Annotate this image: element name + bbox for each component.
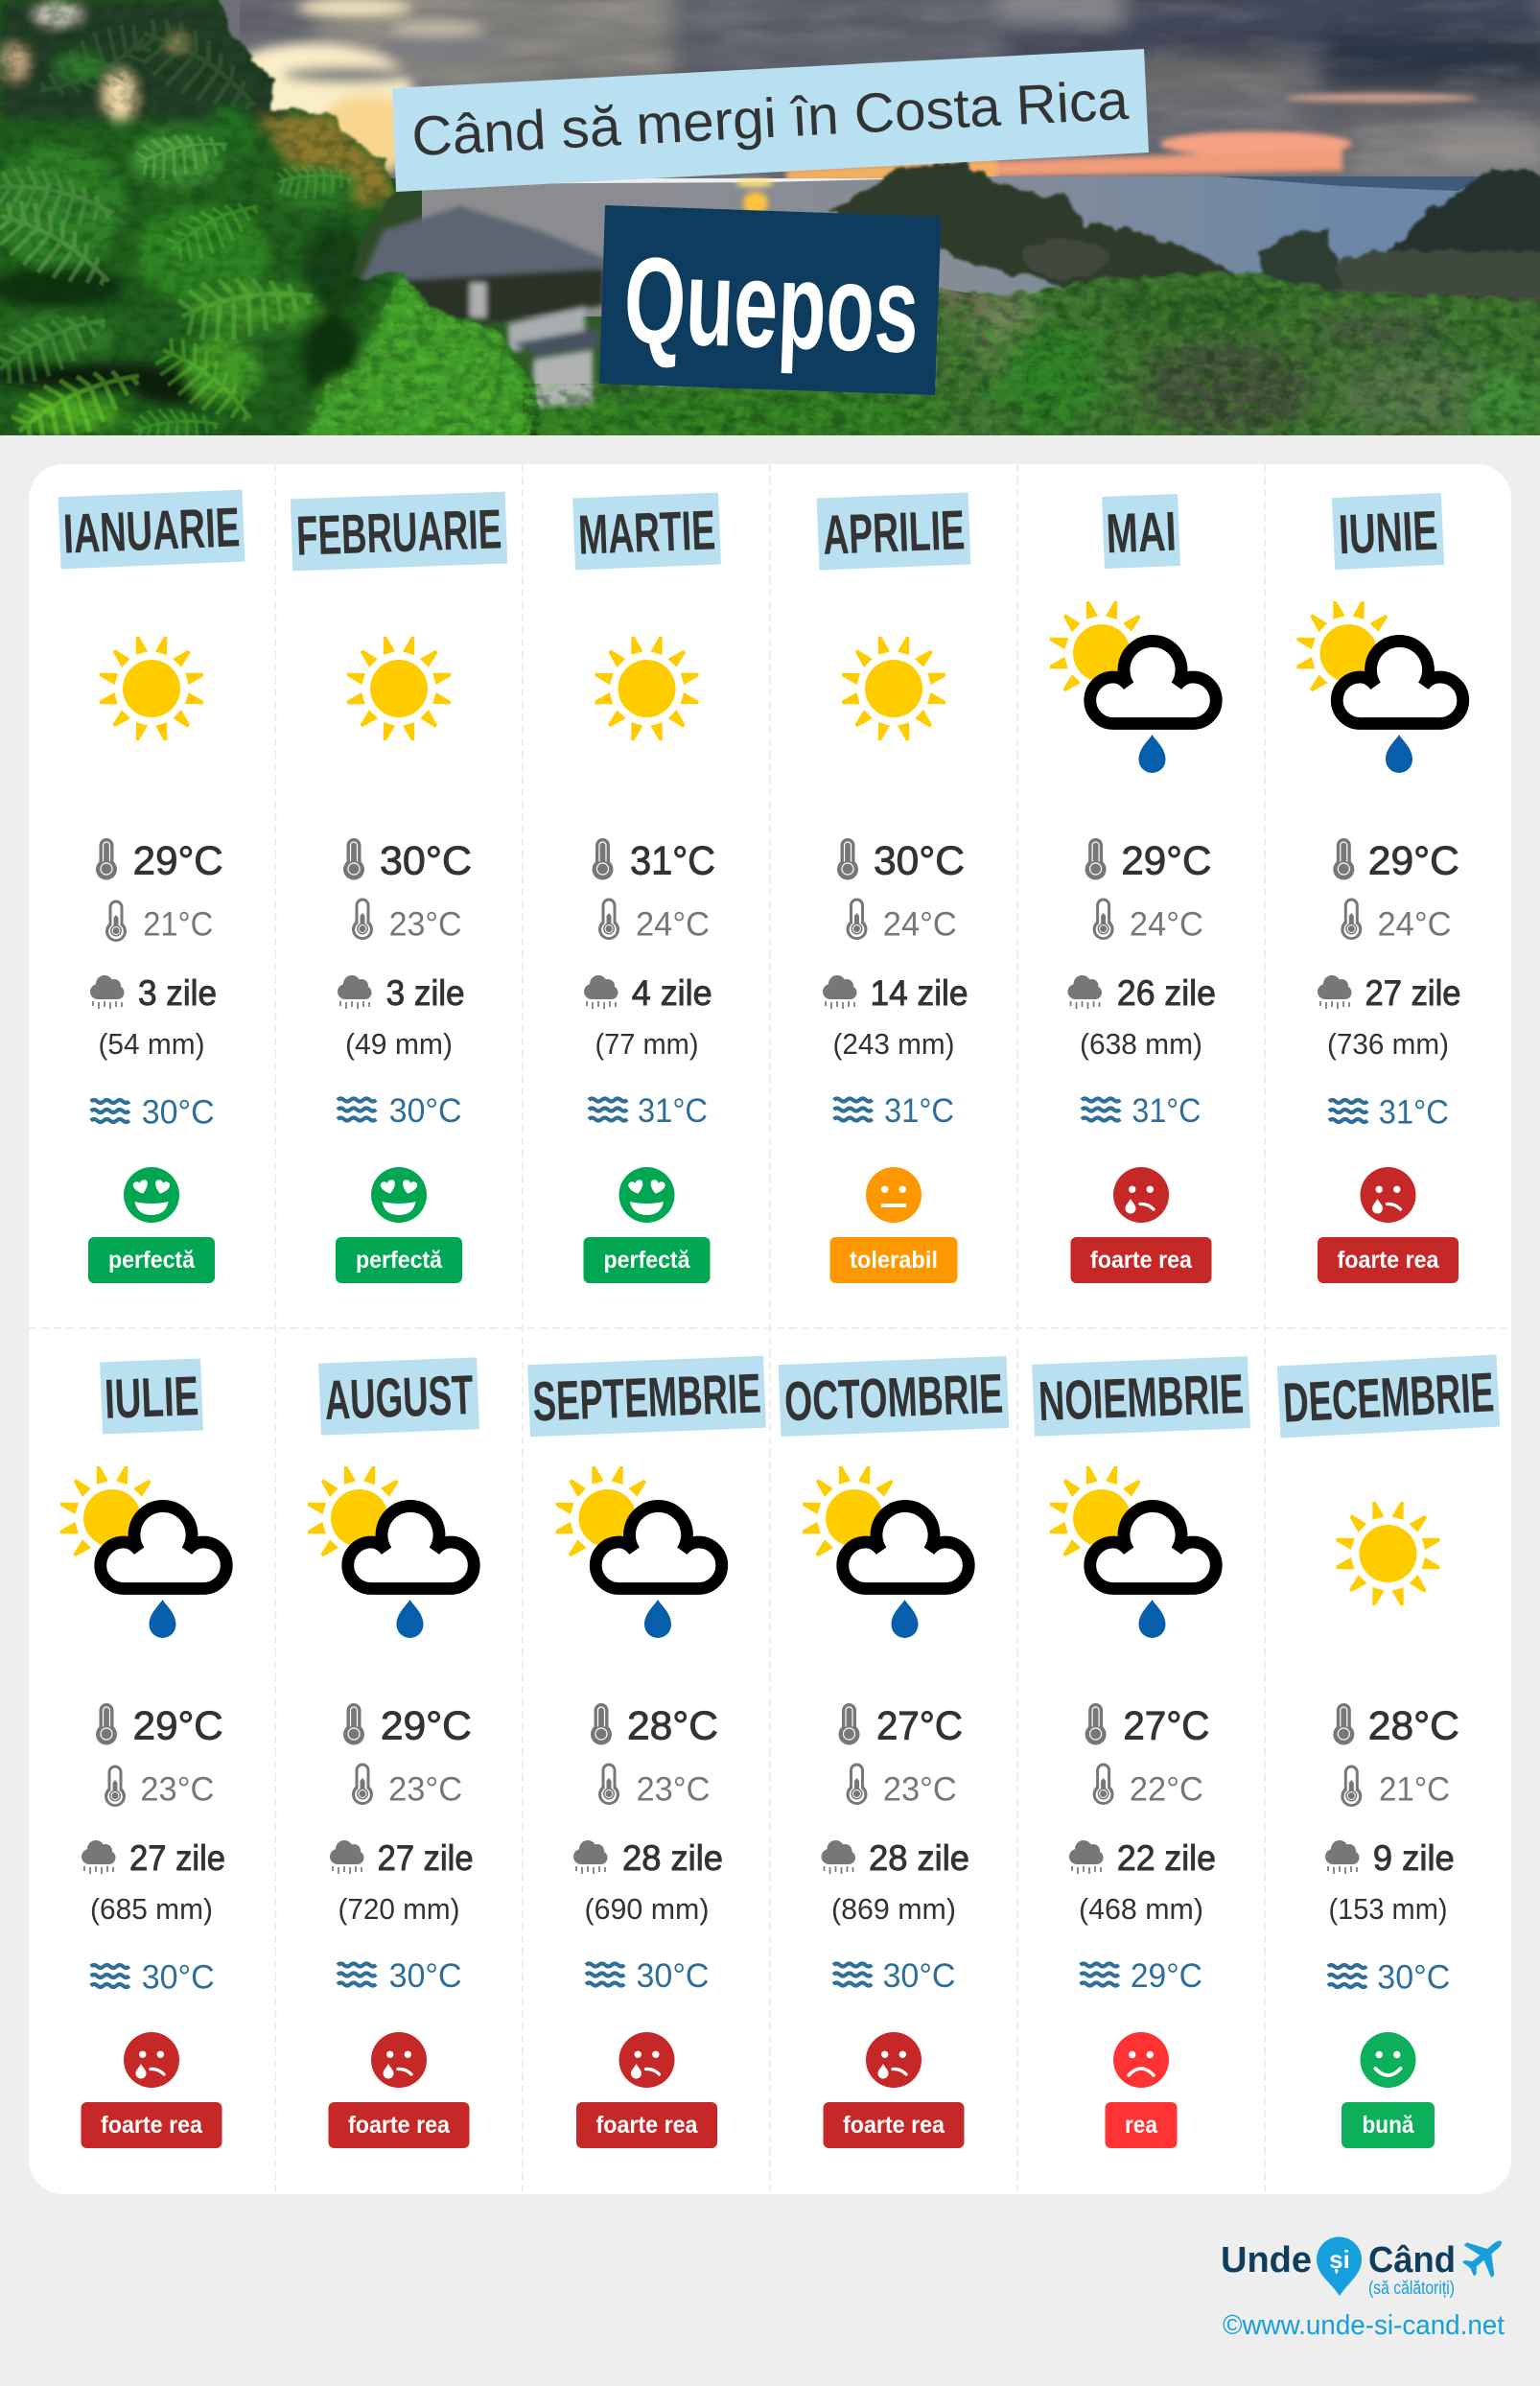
hillside and forest <box>593 269 1540 435</box>
low temperature: 24°C <box>1130 906 1203 944</box>
rainy days <box>823 973 968 1013</box>
rainy days: 22 zile <box>1117 1838 1216 1878</box>
high temperature: 29°C <box>1121 838 1211 883</box>
low temperature: 22°C <box>1130 1771 1203 1809</box>
low temperature <box>846 1763 957 1809</box>
rainy days: 9 zile <box>1373 1838 1455 1878</box>
sea temperature <box>834 1092 954 1130</box>
logo: Unde și Când <box>1221 2225 1515 2299</box>
month label: SEPTEMBRIE <box>527 1356 766 1437</box>
month label: APRILIE: APRILIE <box>822 499 966 567</box>
low temperature <box>598 898 710 944</box>
month label: IULIE <box>100 1359 203 1434</box>
high temperature: 31°C <box>630 838 715 883</box>
high temperature: 29°C <box>381 1703 472 1748</box>
low temperature: 24°C <box>636 906 710 944</box>
rainy days <box>1069 1838 1216 1878</box>
low temperature: 21°C <box>143 906 213 944</box>
icon: rating face <box>124 1167 179 1223</box>
rainy days: 27 zile <box>129 1838 225 1878</box>
high temperature: 28°C <box>1368 1703 1459 1748</box>
city name box <box>599 205 942 395</box>
low temperature <box>598 1763 710 1809</box>
month label: AUGUST <box>318 1357 479 1436</box>
high temperature: 27°C <box>876 1703 963 1748</box>
low temperature <box>105 900 213 944</box>
month label: MARTIE: MARTIE <box>577 499 716 567</box>
sea temperature <box>91 1959 215 1997</box>
sea temperature <box>586 1957 710 1995</box>
icon: rating face <box>1360 2032 1415 2088</box>
rating badge <box>823 2102 965 2148</box>
column: mai <box>1050 494 1216 1283</box>
sea temperature <box>589 1092 708 1130</box>
rainy days <box>821 1838 969 1878</box>
icon: sun <box>347 637 451 740</box>
month label: MAI <box>1102 494 1180 569</box>
high temperature <box>1085 1703 1209 1748</box>
icon: map pin <box>1317 2236 1362 2296</box>
rating badge <box>583 1237 710 1283</box>
high temperature: 29°C <box>133 1703 223 1748</box>
rating badge <box>328 2102 470 2148</box>
month label: MAI: MAI <box>1105 501 1178 565</box>
rainy days <box>338 973 465 1013</box>
sea temperature: 31°C <box>1379 1094 1449 1132</box>
icon: sun, cloud and rain drop <box>803 1466 968 1638</box>
rating badge: foarte rea <box>348 2112 451 2139</box>
high temperature: 30°C <box>380 838 472 883</box>
sea temperature: 31°C <box>1132 1092 1201 1130</box>
sea temperature: 30°C <box>1377 1959 1450 1997</box>
icon: sun, cloud and rain drop <box>1296 601 1463 773</box>
rainfall: (243 mm) <box>832 1027 955 1061</box>
low temperature <box>1093 898 1203 944</box>
month label: APRILIE <box>817 492 970 571</box>
low temperature: 24°C <box>883 906 957 944</box>
month label: SEPTEMBRIE: SEPTEMBRIE <box>531 1362 762 1434</box>
villa <box>359 204 612 435</box>
rainy days: 3 zile <box>138 973 217 1013</box>
sea temperature <box>1081 1957 1202 1995</box>
icon: rating face <box>866 2032 922 2088</box>
month label: IANUARIE: IANUARIE <box>62 496 241 566</box>
low temperature <box>352 1763 462 1809</box>
website link: ©www.unde-si-cand.net <box>1223 2310 1505 2341</box>
icon: sun <box>842 637 945 740</box>
column: decembrie <box>1277 1355 1500 2148</box>
logo: Unde și Când: (să călătoriți) <box>1368 2279 1455 2299</box>
sea temperature: 31°C <box>884 1092 954 1130</box>
rating badge <box>576 2102 717 2148</box>
rainy days: 3 zile <box>386 973 465 1013</box>
rainy days <box>90 973 217 1013</box>
low temperature <box>1093 1763 1203 1809</box>
column: noiembrie <box>1032 1356 1250 2148</box>
rainy days: 28 zile <box>622 1838 723 1878</box>
month label: FEBRUARIE <box>291 492 507 571</box>
rainfall: (468 mm) <box>1079 1892 1203 1926</box>
rainfall: (638 mm) <box>1080 1027 1202 1061</box>
rating badge <box>1342 2102 1435 2148</box>
left jungle <box>0 0 547 461</box>
column: aprilie <box>817 492 970 1283</box>
low temperature <box>846 898 957 944</box>
column: iulie <box>60 1359 226 2148</box>
rating badge: foarte rea <box>843 2112 945 2139</box>
sea temperature <box>91 1094 215 1132</box>
icon: sun <box>595 637 698 740</box>
icon: airplane <box>1455 2225 1515 2285</box>
high temperature: 30°C <box>874 838 965 883</box>
rainfall: (720 mm) <box>338 1892 460 1926</box>
column: octombrie <box>779 1356 1009 2148</box>
hills <box>829 163 1540 316</box>
icon: sun <box>1337 1502 1440 1605</box>
icon: sun, cloud and rain drop <box>556 1466 722 1638</box>
rainfall: (153 mm) <box>1329 1892 1448 1926</box>
low temperature: 23°C <box>388 1771 462 1809</box>
sea temperature: 30°C <box>142 1959 215 1997</box>
rating badge: foarte rea <box>596 2112 699 2139</box>
rating badge <box>1318 1237 1458 1283</box>
city name box: Quepos <box>622 232 921 379</box>
sea temperature: 29°C <box>1131 1957 1202 1995</box>
rainy days <box>82 1838 225 1878</box>
hero photo: sunset over jungle and sea <box>0 0 1540 461</box>
icon: rating face <box>1113 2032 1169 2088</box>
sea temperature <box>833 1957 955 1995</box>
month label: OCTOMBRIE <box>779 1356 1009 1437</box>
sea temperature: 30°C <box>389 1957 462 1995</box>
rating badge: perfectă <box>356 1247 443 1274</box>
low temperature: 23°C <box>389 906 462 944</box>
icon: rating face <box>371 1167 427 1223</box>
month label: FEBRUARIE: FEBRUARIE <box>295 498 502 568</box>
rainfall: (690 mm) <box>585 1892 710 1926</box>
sea temperature: 31°C <box>638 1092 708 1130</box>
month label: IANUARIE <box>58 490 245 569</box>
rating badge: foarte rea <box>101 2112 203 2139</box>
month label: NOIEMBRIE: NOIEMBRIE <box>1038 1363 1245 1433</box>
icon: rating face <box>1360 1167 1415 1223</box>
rainy days <box>584 973 712 1013</box>
high temperature: 29°C <box>1368 838 1459 883</box>
rating badge <box>81 2102 222 2148</box>
title banner: Când să mergi în Costa Rica <box>410 69 1131 168</box>
sea temperature: 30°C <box>637 1957 710 1995</box>
rating badge <box>1105 2102 1178 2148</box>
low temperature <box>105 1765 214 1809</box>
low temperature <box>1341 898 1452 944</box>
low temperature: 23°C <box>883 1771 957 1809</box>
rating badge: perfectă <box>604 1247 691 1274</box>
low temperature: 23°C <box>140 1771 214 1809</box>
rating badge: perfectă <box>108 1247 196 1274</box>
rating badge: rea <box>1125 2112 1158 2139</box>
sea temperature <box>1328 1959 1450 1997</box>
rainy days: 4 zile <box>632 973 712 1013</box>
rainy days: 26 zile <box>1117 973 1216 1013</box>
high temperature: 29°C <box>133 838 223 883</box>
logo: Unde și Când: Unde <box>1221 2240 1312 2281</box>
icon: sun, cloud and rain drop <box>60 1466 226 1638</box>
rainy days: 28 zile <box>869 1838 969 1878</box>
rating badge: foarte rea <box>1337 1247 1440 1274</box>
rainy days <box>1068 973 1216 1013</box>
month label: OCTOMBRIE: OCTOMBRIE <box>783 1363 1004 1433</box>
rainy days <box>1318 973 1461 1013</box>
icon: rating face <box>619 2032 675 2088</box>
rating badge: foarte rea <box>1090 1247 1193 1274</box>
rainy days: 27 zile <box>1365 973 1461 1013</box>
icon: sun, cloud and rain drop <box>1050 1466 1216 1638</box>
rating badge <box>830 1237 957 1283</box>
icon: rating face <box>1113 1167 1169 1223</box>
rainy days: 27 zile <box>378 1838 474 1878</box>
rating badge <box>336 1237 462 1283</box>
panel: months table <box>29 464 1511 2194</box>
rainfall: (49 mm) <box>345 1027 453 1061</box>
forest texture <box>518 273 1540 436</box>
icon: sun, cloud and rain drop <box>308 1466 474 1638</box>
sea temperature: 30°C <box>882 1957 955 1995</box>
icon: rating face <box>866 1167 922 1223</box>
rating badge: tolerabil <box>850 1247 938 1274</box>
rating badge <box>1070 1237 1212 1283</box>
sea temperature: 30°C <box>389 1092 462 1130</box>
high temperature <box>593 838 715 883</box>
high temperature: 28°C <box>627 1703 718 1748</box>
icon: rating face <box>371 2032 427 2088</box>
icon: rating face <box>124 2032 179 2088</box>
month label: NOIEMBRIE <box>1032 1356 1250 1437</box>
column: septembrie <box>527 1356 766 2148</box>
low temperature <box>1341 1765 1450 1809</box>
rainy days <box>573 1838 723 1878</box>
sea temperature <box>1329 1094 1449 1132</box>
sea temperature <box>338 1092 462 1130</box>
rainfall: (54 mm) <box>98 1027 205 1061</box>
month label: AUGUST: AUGUST <box>323 1364 475 1432</box>
month label: MARTIE <box>572 493 721 570</box>
icon: sun <box>100 637 203 740</box>
rainfall: (685 mm) <box>90 1892 213 1926</box>
column: februarie <box>291 492 507 1283</box>
low temperature <box>352 898 462 944</box>
month label: IULIE: IULIE <box>104 1365 199 1431</box>
sea temperature <box>338 1957 462 1995</box>
rating badge: bună <box>1362 2112 1414 2139</box>
column: martie <box>572 493 721 1283</box>
rainfall: (869 mm) <box>831 1892 956 1926</box>
column: iunie <box>1296 493 1463 1283</box>
icon: sun, cloud and rain drop <box>1050 601 1216 773</box>
rainy days: 14 zile <box>871 973 968 1013</box>
month label: IUNIE: IUNIE <box>1338 500 1438 566</box>
rating badge <box>88 1237 215 1283</box>
high temperature <box>838 1703 963 1748</box>
high temperature: 27°C <box>1123 1703 1209 1748</box>
rainy days <box>1325 1838 1455 1878</box>
logo: Unde și Când: Când <box>1368 2240 1456 2281</box>
sea temperature: 30°C <box>142 1094 215 1132</box>
rainy days <box>330 1838 474 1878</box>
low temperature: 21°C <box>1379 1771 1450 1809</box>
month label: IUNIE <box>1332 493 1444 570</box>
sea temperature <box>1082 1092 1201 1130</box>
low temperature: 24°C <box>1377 906 1452 944</box>
rainfall: (736 mm) <box>1327 1027 1449 1061</box>
column: ianuarie <box>58 490 245 1283</box>
logo: Unde și Când: și <box>1329 2245 1350 2274</box>
column: august <box>308 1357 479 2148</box>
low temperature: 23°C <box>637 1771 710 1809</box>
icon: rating face <box>619 1167 675 1223</box>
rainfall: (77 mm) <box>595 1027 698 1061</box>
title banner <box>392 49 1149 192</box>
